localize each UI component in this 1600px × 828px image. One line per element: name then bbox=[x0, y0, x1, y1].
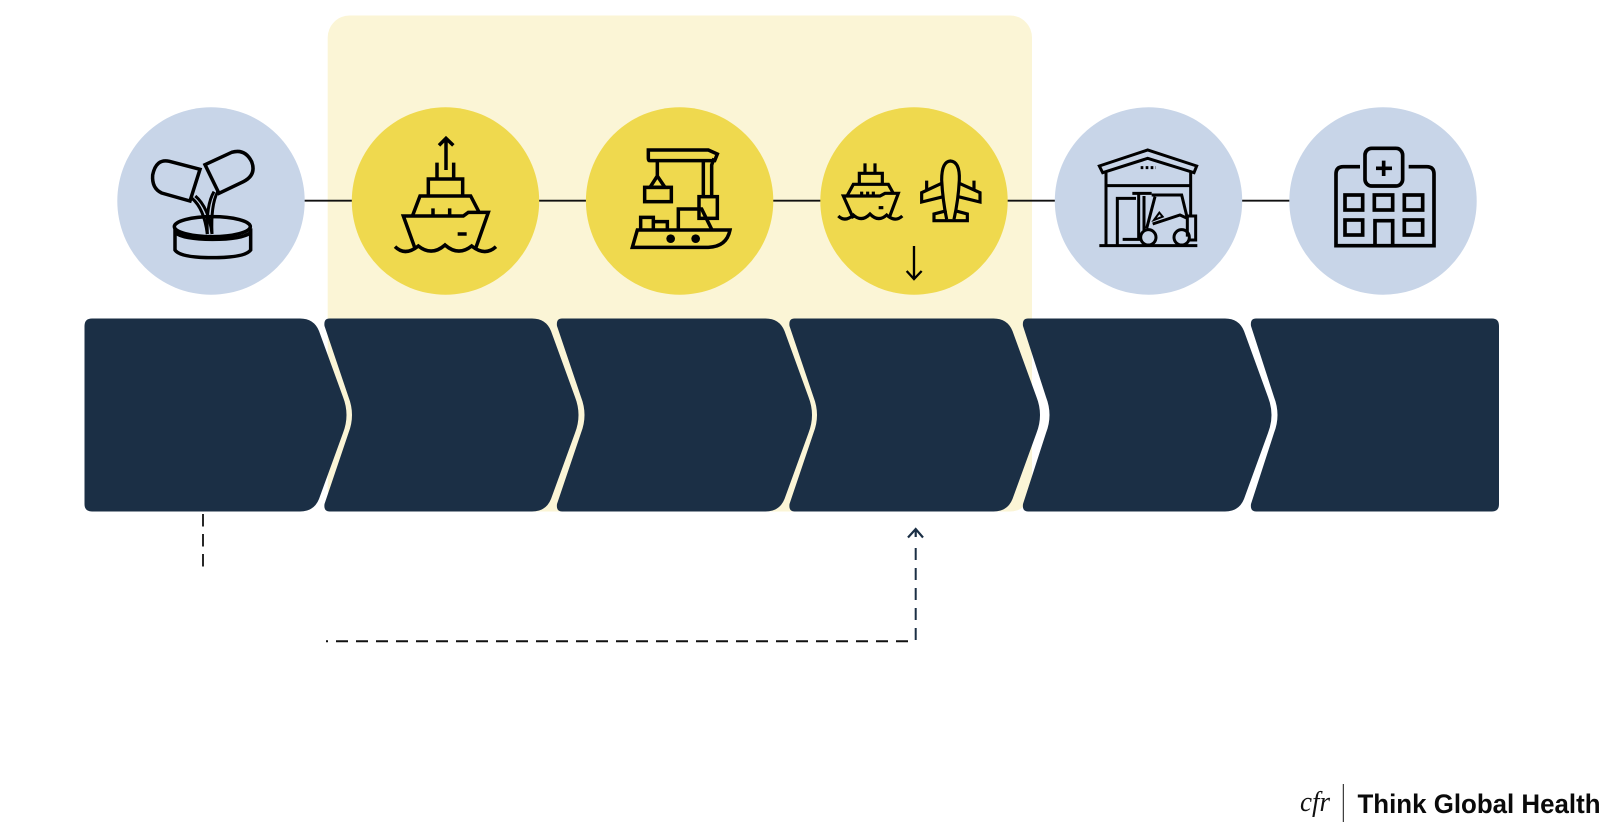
dashed line below step 1 bbox=[202, 514, 204, 567]
chevron step 1 bbox=[84, 318, 346, 512]
chevron step 5 bbox=[1023, 318, 1272, 512]
logo: cfr and Think Global Health: Think Global Health bbox=[1358, 789, 1600, 819]
step 1 circle: pills icon bbox=[117, 107, 305, 295]
icon: small ship bbox=[838, 163, 902, 219]
step 3 circle: port crane icon bbox=[586, 107, 773, 295]
chevron step 4 bbox=[789, 318, 1040, 512]
icon: crane loading ship bbox=[632, 150, 730, 247]
step 4 circle: ship and plane icon bbox=[820, 107, 1008, 295]
logo: cfr and Think Global Health: cfr bbox=[1300, 786, 1331, 818]
icon: plane bbox=[922, 161, 980, 221]
chevron step 2 bbox=[324, 318, 578, 512]
step 6 circle: hospital icon bbox=[1289, 107, 1477, 295]
highlight panel: cream backdrop bbox=[328, 16, 1032, 512]
icon: down arrow bbox=[907, 246, 922, 279]
dashed arrow to step 4 bbox=[326, 529, 923, 641]
chevron step 6 bbox=[1251, 318, 1499, 512]
icon: warehouse with forklift bbox=[1099, 150, 1197, 246]
chevron step 3 bbox=[557, 318, 812, 512]
connector line between circles bbox=[300, 200, 1295, 202]
step 5 circle: warehouse icon bbox=[1055, 107, 1242, 295]
icon: hospital bbox=[1336, 148, 1434, 246]
icon: pills pouring into dish bbox=[153, 151, 253, 258]
logo: cfr and Think Global Health bbox=[1300, 784, 1600, 822]
step 2 circle: export ship icon bbox=[352, 107, 539, 295]
icon: ship with up arrow bbox=[395, 138, 496, 252]
